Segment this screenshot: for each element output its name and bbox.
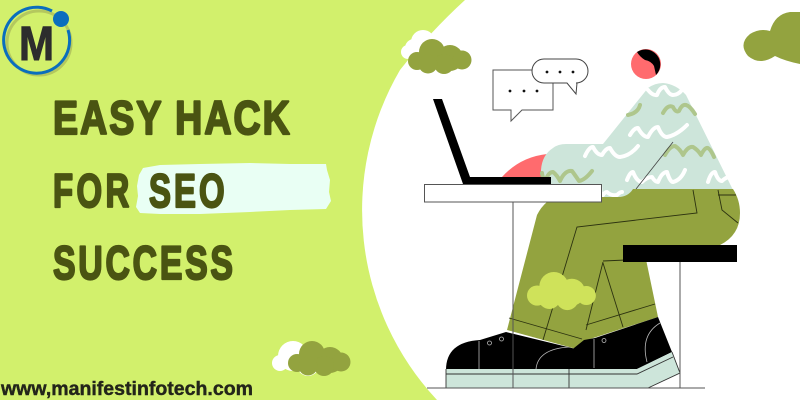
arm [502,154,547,178]
cloud: top behind [401,30,472,74]
left shoe [446,332,580,370]
cloud: top right [743,12,800,64]
title: SEO [149,164,225,217]
cloud: bottom left [272,341,350,376]
person [446,49,740,388]
laptop [433,99,551,184]
logo: M [19,18,54,71]
shoe soles [446,352,680,388]
website url: www,manifestinfotech.com [0,379,253,400]
white circle backdrop [362,0,800,400]
head [631,49,661,79]
SEO highlight brush [136,163,331,214]
stool seat [623,245,737,262]
trouser creases [509,190,738,340]
right shoe [569,317,672,369]
logo [4,7,71,75]
sweater [541,83,733,197]
title: EASY HACK [53,92,290,145]
trousers [507,189,740,350]
cloud: on leg [527,272,596,310]
sleeve line [636,142,673,189]
speech bubbles [493,59,588,121]
title [53,92,290,289]
shoe details [479,323,660,369]
sole lines [446,352,680,388]
table legs and ground [427,202,705,388]
title: SUCCESS [53,237,233,289]
desk [424,184,602,202]
title: FOR [53,164,129,217]
sweater pattern [542,87,730,195]
